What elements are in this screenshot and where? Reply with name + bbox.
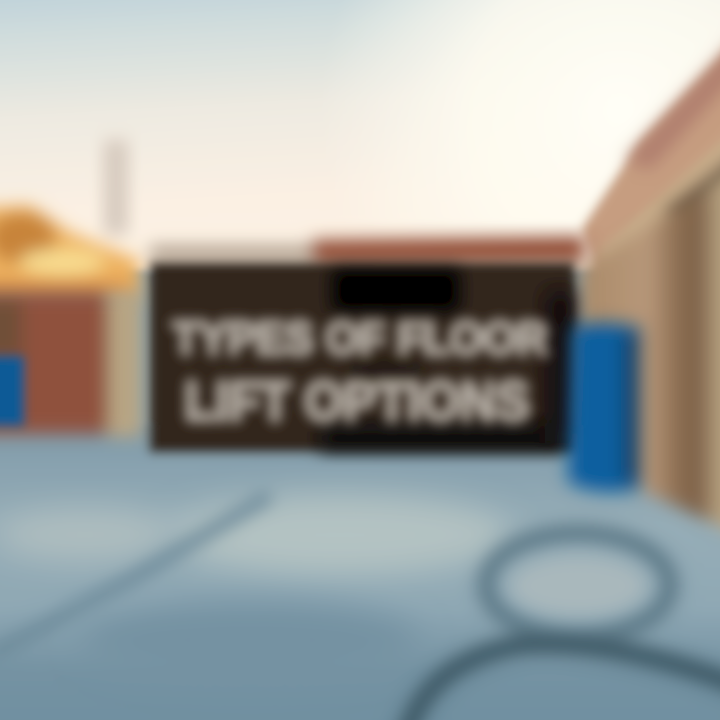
sign text: TYPES OF FLOOR bbox=[172, 312, 548, 364]
sign roof band bbox=[150, 236, 585, 264]
left blue barrel bbox=[0, 356, 24, 426]
hose loops on ground bbox=[405, 533, 720, 720]
sign panel bbox=[150, 262, 575, 452]
sign text bbox=[172, 312, 548, 432]
sign text: LIFT OPTIONS bbox=[184, 369, 530, 432]
left building: orange roof bbox=[0, 205, 140, 300]
inner hose highlight bbox=[510, 556, 646, 616]
ground bbox=[0, 425, 720, 720]
right blue barrel bbox=[568, 323, 640, 492]
right building: roof and wall bbox=[580, 25, 720, 540]
distant pole bbox=[104, 140, 128, 235]
left building: red brick wall bbox=[0, 292, 142, 437]
sky bbox=[0, 0, 720, 270]
